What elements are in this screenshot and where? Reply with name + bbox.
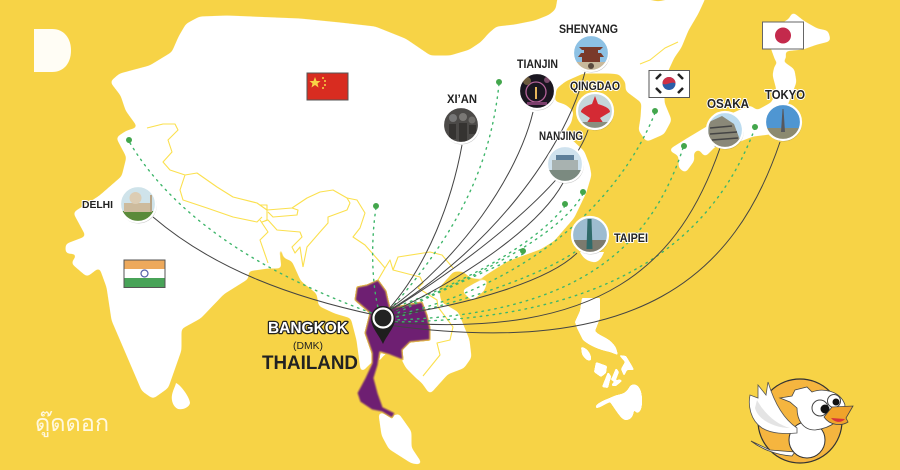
city labels: TOKYO: [765, 87, 805, 102]
Bangkok label: THAILAND: [262, 352, 358, 374]
mascot: duck: [749, 379, 853, 463]
city labels: QINGDAO: [570, 79, 620, 93]
Bangkok label: (DMK): [293, 340, 323, 352]
photo: Xi'an: [443, 107, 480, 144]
city labels: DELHI: [82, 199, 113, 211]
map: Hainan: [464, 281, 486, 299]
map: yellow country borders: [147, 42, 678, 376]
photo: Qingdao: [577, 93, 614, 130]
photo: Nanjing: [547, 146, 584, 184]
logo: wordmark: ดู๊ดดอก: [35, 410, 109, 438]
flag: South Korea: [649, 70, 690, 98]
country: Thailand: [355, 280, 430, 418]
photo: Tianjin: [519, 73, 556, 110]
map: Sri Lanka: [172, 383, 190, 409]
Bangkok pin: [371, 306, 395, 344]
flag: India: [124, 260, 165, 288]
photo: Osaka: [707, 112, 744, 150]
Bangkok label: [262, 320, 358, 374]
flag: Japan: [762, 22, 804, 49]
map: Asia mainland: [67, 0, 706, 397]
map: Taiwan: [580, 252, 604, 262]
map: Japan: [671, 14, 829, 171]
city labels: [82, 22, 805, 245]
routes: dotted green routes to secondary destinations: [126, 79, 758, 322]
photo: Delhi: [120, 186, 157, 224]
city labels: TAIPEI: [614, 231, 648, 245]
logo: D mark: [34, 29, 71, 72]
city labels: SHENYANG: [559, 22, 618, 36]
map: Philippines: [575, 298, 642, 420]
city labels: NANJING: [539, 129, 583, 143]
photo: Shenyang: [573, 35, 610, 72]
photo: Tokyo: [765, 104, 802, 142]
Bangkok label: BANGKOK: [268, 320, 349, 337]
routes: solid flight lines: [153, 72, 780, 333]
city labels: XI’AN: [447, 92, 477, 106]
photo: Taipei: [572, 217, 609, 254]
destination dots: [126, 79, 758, 254]
map: Malay peninsula: [380, 414, 420, 463]
city labels: OSAKA: [707, 96, 750, 111]
city labels: TIANJIN: [517, 57, 558, 71]
flag: China: [307, 73, 348, 100]
